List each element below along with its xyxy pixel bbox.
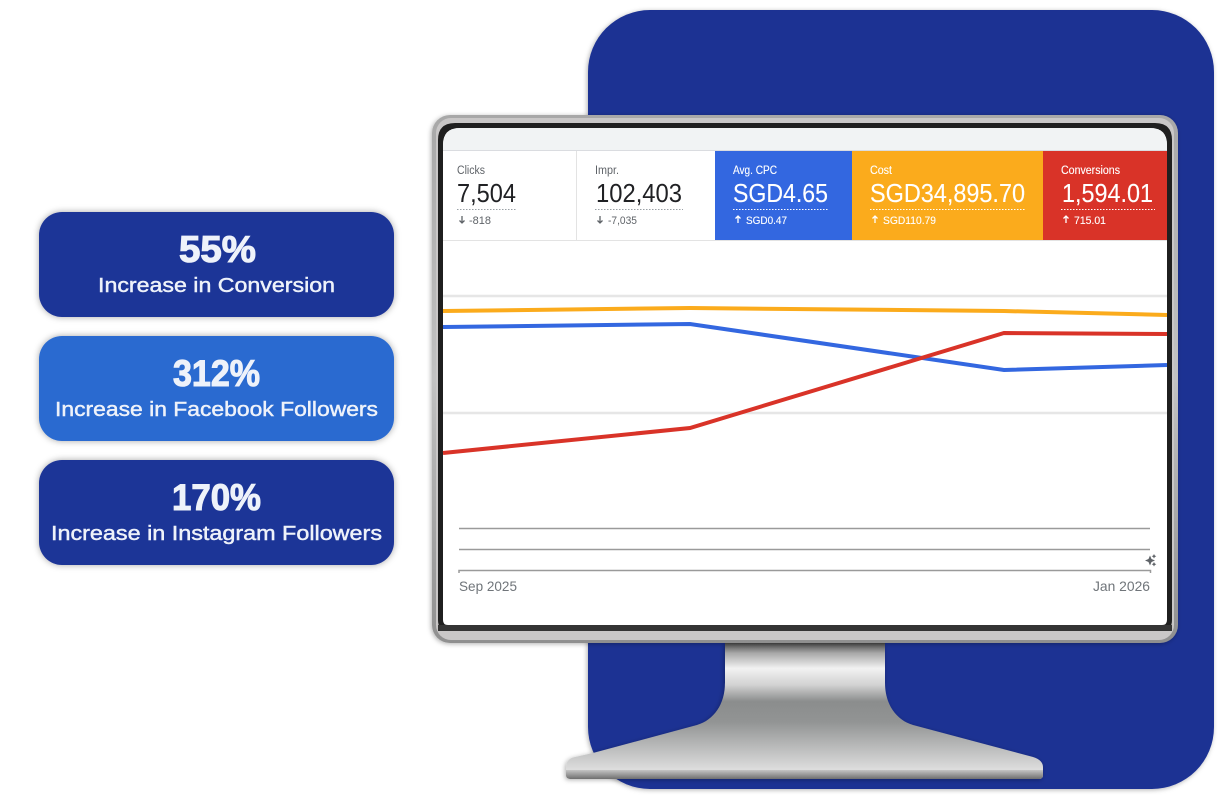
stat card: Instagram followers: 170%	[172, 477, 261, 518]
metric: conversions: Conversions	[1061, 165, 1120, 177]
stat card: Facebook followers: 312%	[173, 353, 260, 394]
metric: conversions: 715.01	[1074, 215, 1106, 227]
stat card: conversion: 55%	[179, 229, 256, 270]
axis label: end date: Jan 2026	[1093, 578, 1150, 594]
stat card: conversion: Increase in Conversion	[98, 275, 335, 297]
metric: impressions	[595, 165, 683, 227]
metric: average CPC: SGD4.65	[733, 180, 828, 208]
line chart	[443, 296, 1167, 573]
metric: clicks: Clicks	[457, 165, 485, 177]
screen	[443, 128, 1167, 625]
metric: conversions: 1,594.01	[1062, 180, 1153, 208]
icon: monitor stand	[566, 643, 1043, 779]
icon: sparkle	[1145, 554, 1156, 566]
metric: impressions: 102,403	[596, 180, 682, 208]
metric: cost: Cost	[870, 165, 893, 177]
panel: monitor	[432, 115, 1178, 643]
metric: cost	[852, 151, 1043, 240]
metric: cost: SGD110.79	[883, 215, 936, 227]
stat card: Facebook followers	[39, 336, 394, 441]
metric: average CPC	[715, 151, 852, 240]
metric: average CPC: Avg. CPC	[733, 165, 777, 177]
series: conversions	[443, 333, 1167, 453]
series: average CPC	[443, 324, 1167, 370]
metric: impressions: -7,035	[608, 215, 637, 227]
metric: clicks	[457, 165, 516, 227]
stat card: Facebook followers: Increase in Facebook Followers	[55, 399, 378, 421]
metric: average CPC: SGD0.47	[746, 215, 787, 227]
stat card: conversion	[39, 212, 394, 317]
stat card: Instagram followers: Increase in Instagram Followers	[51, 523, 382, 545]
axis label: start date: Sep 2025	[459, 578, 517, 594]
metric: clicks: 7,504	[457, 180, 516, 208]
series: cost	[443, 308, 1167, 315]
monitor frame	[432, 115, 1178, 643]
metric: cost: SGD34,895.70	[870, 180, 1025, 208]
metric: impressions: Impr.	[595, 165, 619, 177]
metric: conversions	[1043, 151, 1167, 240]
panel: blue background	[588, 10, 1214, 789]
metric: clicks: -818	[469, 215, 491, 227]
stat card: Instagram followers	[39, 460, 394, 565]
